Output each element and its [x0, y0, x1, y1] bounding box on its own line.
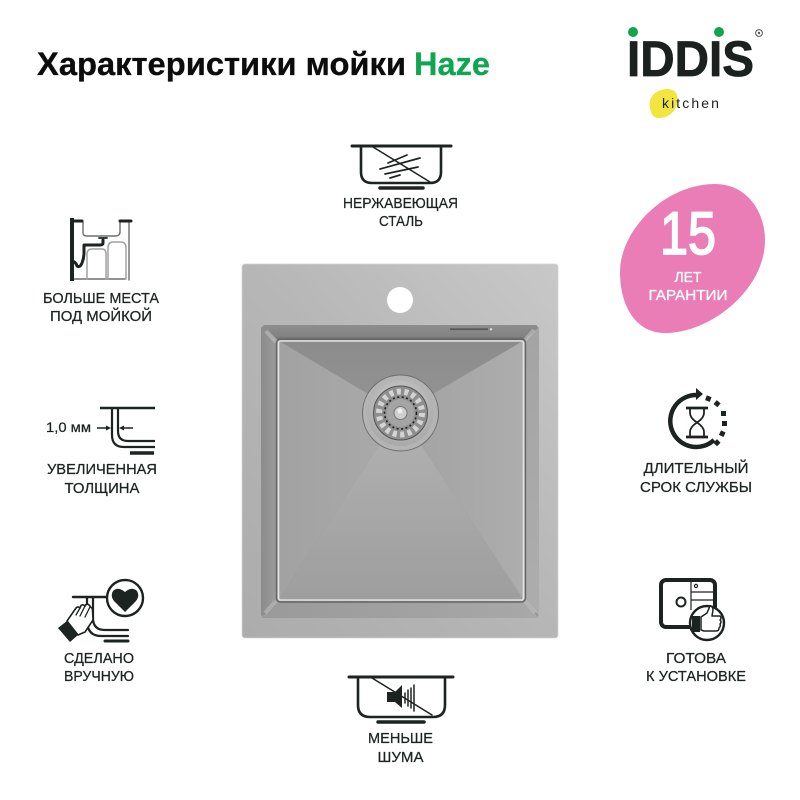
floor edge highlight: [278, 341, 524, 600]
label: ПОД МОЙКОЙ: [50, 307, 152, 325]
logo kitchen text: kitchen: [662, 95, 721, 111]
feature: less noise: [349, 677, 453, 766]
label: [646, 650, 746, 685]
logo dots: [628, 27, 724, 37]
label: УВЕЛИЧЕННАЯ: [47, 461, 157, 478]
bowl walls: [261, 325, 539, 618]
badge caption: ГАРАНТИИ: [648, 287, 728, 304]
label: ВРУЧНУЮ: [64, 668, 134, 685]
badge caption: ЛЕТ: [674, 269, 702, 286]
label: БОЛЬШЕ МЕСТА: [43, 290, 159, 307]
label: [343, 195, 458, 230]
logo wordmark: IDDIS: [627, 31, 754, 87]
label: [368, 730, 433, 766]
badge: 15 years warranty: [620, 184, 765, 333]
label: МЕНЬШЕ: [368, 730, 433, 747]
label: ШУМА: [378, 749, 424, 766]
icon: cabinet with thumbs up: [661, 580, 724, 640]
icon: hand and heart: [58, 580, 143, 642]
thickness value: 1,0 мм: [46, 419, 91, 435]
floor edge shadow: [276, 339, 526, 602]
registered mark: [756, 30, 762, 36]
title: Характеристики мойки: [37, 46, 406, 82]
label: [64, 650, 134, 685]
title: Haze: [414, 46, 490, 82]
badge caption: [648, 269, 728, 304]
label: СРОК СЛУЖБЫ: [640, 479, 752, 496]
logo: iddis kitchen: [627, 27, 762, 118]
feature: stainless steel: [343, 146, 458, 230]
feature: long service life: [640, 388, 752, 496]
feature: increased thickness: [46, 408, 157, 497]
feature: more space under sink: [43, 218, 159, 325]
icon: sink edge profile: [97, 408, 155, 453]
drain strainer: [362, 375, 438, 451]
yellow blob: [650, 89, 678, 118]
icon: sink with scratches: [352, 146, 451, 188]
icon: cabinet under sink: [72, 218, 131, 281]
badge number: 15: [660, 200, 716, 267]
label: ТОЛЩИНА: [64, 480, 140, 497]
feature: handmade: [58, 580, 143, 685]
sink plate: [242, 264, 558, 638]
overflow slot: [450, 328, 492, 330]
bowl floor: [279, 341, 523, 599]
label: НЕРЖАВЕЮЩАЯ: [343, 195, 458, 212]
label: К УСТАНОВКЕ: [646, 668, 746, 685]
icon: hourglass with arrow: [670, 388, 727, 447]
faucet hole: [387, 287, 413, 313]
feature: ready to install: [646, 580, 746, 685]
icon: sink with muted speaker: [349, 677, 453, 722]
label: [640, 459, 752, 496]
label: СТАЛЬ: [379, 213, 423, 230]
label: ГОТОВА: [666, 650, 726, 667]
sink product image: [242, 264, 558, 638]
label: [47, 461, 157, 497]
pink blob: [620, 184, 765, 333]
label: СДЕЛАНО: [64, 650, 134, 667]
label: ДЛИТЕЛЬНЫЙ: [644, 459, 748, 477]
label: [43, 290, 159, 325]
